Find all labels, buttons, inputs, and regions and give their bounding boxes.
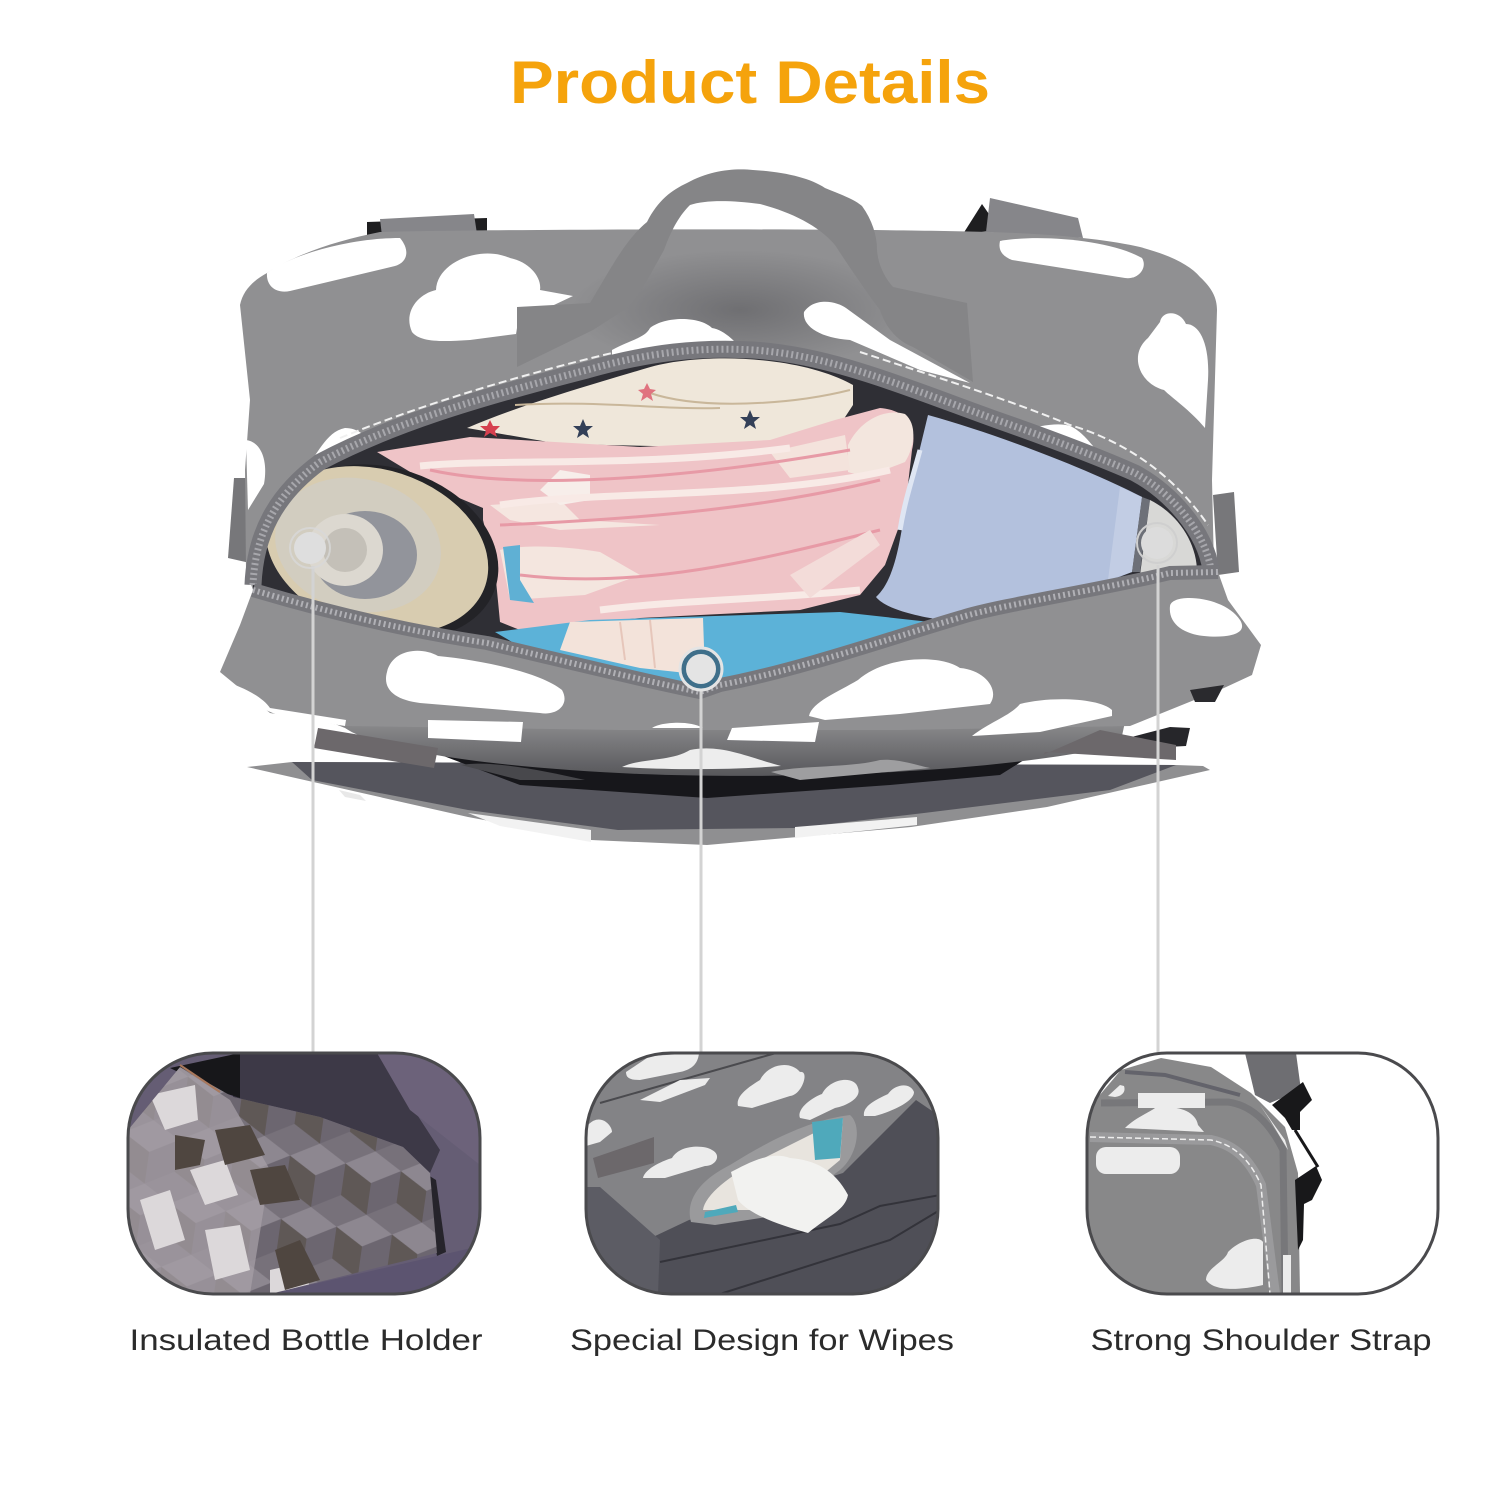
- detail photo: insulated bottle holder: [120, 1050, 480, 1300]
- detail photo: shoulder strap: [1087, 1053, 1438, 1294]
- blue wipes pack: [495, 612, 924, 682]
- baby blanket: [467, 358, 853, 447]
- bag contents: [253, 358, 1202, 682]
- detail photo: wipes pocket: [586, 1053, 940, 1294]
- label: insulated bottle holder: Insulated Bottle Holder: [130, 1324, 483, 1357]
- front flap: [220, 572, 1261, 742]
- upper zipper: [253, 349, 1211, 585]
- diaper bag illustration: [220, 169, 1261, 845]
- shading under handle: [570, 250, 910, 370]
- pointer: bottle holder: [290, 528, 330, 1052]
- velcro patches: [314, 685, 1224, 768]
- diapers: [377, 408, 913, 630]
- pointer: strap: [1137, 523, 1177, 1054]
- baby bottle: [268, 464, 498, 630]
- bag underside: [330, 722, 1125, 776]
- label: strong shoulder strap: Strong Shoulder Strap: [1090, 1324, 1432, 1357]
- clouds on top body: [246, 238, 1208, 510]
- pointer: wipes: [680, 648, 722, 1052]
- top body: [240, 229, 1217, 610]
- underside clouds: [461, 748, 931, 780]
- title: Product Details: [510, 49, 990, 116]
- dark interior under bag: [441, 750, 1040, 798]
- strap buckles: [367, 198, 1083, 240]
- blue container: [876, 415, 1197, 620]
- carry handle: [517, 169, 973, 382]
- label: special design for wipes: Special Design for Wipes: [570, 1324, 954, 1357]
- side straps: [228, 478, 1239, 575]
- front clouds: [226, 598, 1242, 742]
- lower flap: [247, 762, 1210, 845]
